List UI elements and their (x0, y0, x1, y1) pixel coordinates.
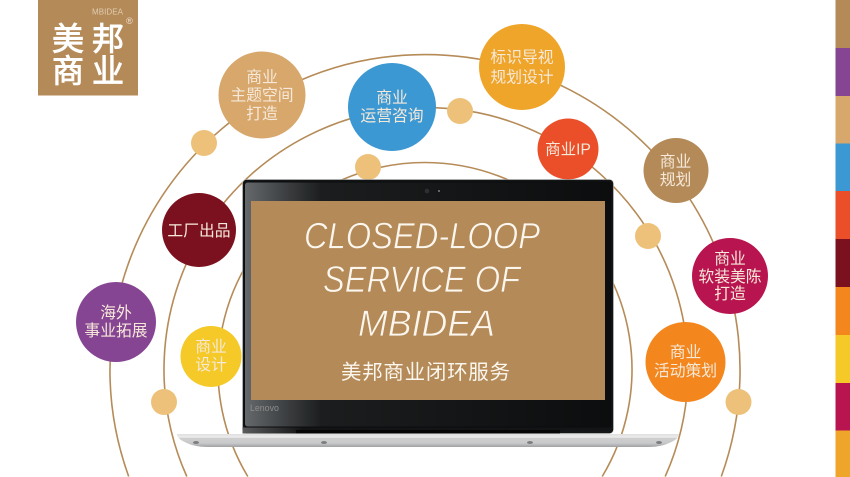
circle: soft furnishing (692, 238, 768, 314)
circle: commercial design (180, 326, 242, 387)
logo: MBIDEA brand block: 邦 (92, 21, 124, 57)
circle: commercial IP (538, 118, 598, 180)
circle: signage planning: 标识导视 (490, 48, 554, 66)
logo: MBIDEA brand block: 商 (52, 53, 84, 89)
logo: MBIDEA brand block: ® (126, 16, 133, 26)
laptop lid (242, 180, 614, 434)
lower lid strip (242, 428, 302, 434)
laptop (177, 180, 679, 447)
laptop screen panel (251, 201, 605, 400)
circle: overseas expansion (76, 282, 156, 362)
circle: commercial design: 设计 (195, 356, 227, 374)
circle: signage planning: 规划设计 (490, 68, 554, 86)
circle: commercial planning (644, 138, 708, 203)
circle: theme space: 打造 (246, 105, 278, 123)
circle: overseas expansion: 事业拓展 (84, 322, 148, 340)
circle: event planning: 商业 (670, 344, 701, 362)
circle: theme space: 商业 (246, 68, 278, 86)
circle: operations consulting (348, 63, 436, 151)
laptop base (177, 434, 679, 447)
circle: commercial planning: 商业 (660, 153, 691, 171)
right colour strip (836, 0, 850, 477)
orbit rings (110, 55, 740, 476)
circle: soft furnishing: 商业 (714, 250, 746, 268)
screen title (304, 214, 540, 344)
screen title: CLOSED-LOOP (304, 214, 540, 256)
circle: factory output (162, 193, 236, 267)
screen title: MBIDEA (358, 302, 495, 344)
screen subtitle: 美邦商业闭环服务 (341, 361, 510, 384)
circle: event planning: 活动策划 (654, 362, 717, 380)
lenovo label: Lenovo (250, 403, 279, 413)
bezel panel (244, 182, 611, 427)
circle: operations consulting: 商业 (376, 89, 408, 107)
screen title: SERVICE OF (323, 258, 522, 300)
logo: MBIDEA brand block: 业 (92, 53, 124, 89)
circle: theme space: 主题空间 (230, 86, 294, 104)
connector dots on rings (151, 98, 752, 415)
circle: factory output: 工厂出品 (167, 222, 231, 240)
circle: commercial design: 商业 (195, 338, 227, 356)
circle: soft furnishing: 软装美陈 (698, 268, 762, 286)
logo: MBIDEA brand block: MBIDEA (92, 8, 124, 16)
circle: operations consulting: 运营咨询 (360, 107, 424, 125)
logo: MBIDEA brand block (38, 0, 138, 96)
circle: event planning (646, 322, 726, 402)
circle: signage planning (479, 24, 565, 110)
circle: commercial planning: 规划 (660, 171, 691, 189)
circle: commercial IP: 商业IP (545, 140, 591, 158)
camera (425, 189, 429, 193)
circle: overseas expansion: 海外 (100, 304, 132, 322)
circle: soft furnishing: 打造 (714, 285, 746, 303)
circle: theme space (218, 52, 306, 138)
logo: MBIDEA brand block: 美 (52, 21, 84, 57)
